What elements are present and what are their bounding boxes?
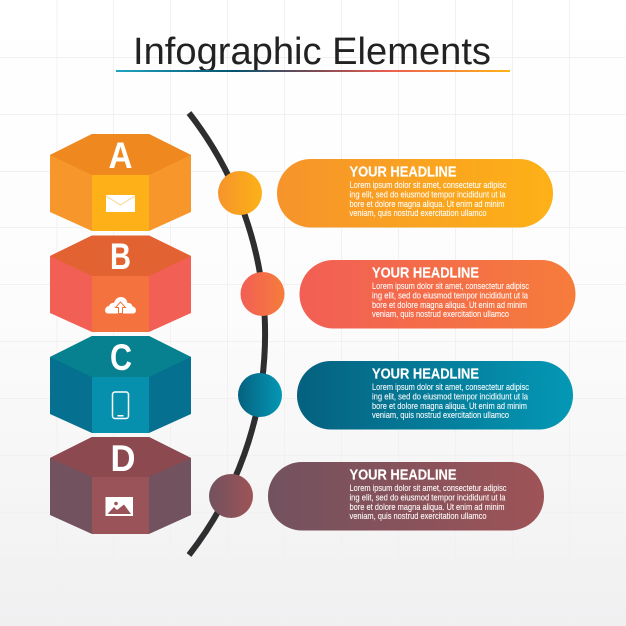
panel: headline A: Lorem ipsum dolor sit amet, consectetur adipisc [350, 180, 507, 190]
icon: picture [106, 497, 133, 516]
panel: headline A: veniam, quis nostrud exercitation ullamco [350, 208, 486, 218]
letter D: D [110, 438, 136, 479]
icon: smartphone [112, 392, 128, 418]
letter C: C [110, 337, 132, 378]
panel: headline A: bore et dolore magna aliqua. Ut enim ad minim [350, 199, 504, 209]
panel: headline B: Lorem ipsum dolor sit amet, consectetur adipisc [372, 281, 529, 291]
icon: cloud upload [105, 297, 136, 314]
panel: headline D [268, 462, 544, 530]
panel: headline B [300, 260, 576, 328]
letter A: A [108, 135, 132, 176]
curved timeline arc [189, 113, 265, 555]
panel: headline A: ing elit, sed do eiusmod tempor incididunt ut la [350, 190, 506, 200]
panel: headline D: bore et dolore magna aliqua. Ut enim ad minim [350, 502, 504, 512]
panel: headline C: veniam, quis nostrud exercitation ullamco [372, 410, 509, 420]
panel: headline B: ing elit, sed do eiusmod tempor incididunt ut la [372, 290, 528, 300]
panel: headline B: YOUR HEADLINE [372, 266, 479, 282]
title underline [116, 70, 510, 72]
panel: headline C: Lorem ipsum dolor sit amet, consectetur adipisc [372, 382, 529, 392]
panel: headline D: YOUR HEADLINE [350, 468, 457, 484]
hexagon block B [50, 236, 191, 332]
panel: headline D: ing elit, sed do eiusmod tempor incididunt ut la [350, 492, 506, 502]
hexagon block C [50, 336, 191, 433]
panel: headline D: veniam, quis nostrud exercitation ullamco [350, 511, 486, 521]
timeline node D [209, 474, 253, 518]
panel: headline B: veniam, quis nostrud exercitation ullamco [372, 309, 509, 319]
panel: headline D: Lorem ipsum dolor sit amet, consectetur adipisc [350, 483, 507, 493]
timeline node C [238, 373, 282, 417]
hexagon block A [50, 134, 191, 231]
timeline node B [240, 272, 284, 316]
panel: headline C: ing elit, sed do eiusmod tempor incididunt ut la [372, 392, 528, 402]
panel: headline C [297, 361, 573, 430]
panel: headline C: bore et dolore magna aliqua. Ut enim ad minim [372, 401, 527, 411]
hexagon block D [50, 437, 191, 534]
title: Infographic Elements [133, 31, 491, 73]
panel: headline C: YOUR HEADLINE [372, 366, 479, 382]
icon: envelope [106, 195, 135, 212]
panel: headline B: bore et dolore magna aliqua. Ut enim ad minim [372, 300, 527, 310]
timeline node A [218, 171, 262, 215]
panel: headline A: YOUR HEADLINE [350, 164, 457, 180]
letter B: B [110, 236, 131, 277]
panel: headline A [277, 159, 553, 228]
